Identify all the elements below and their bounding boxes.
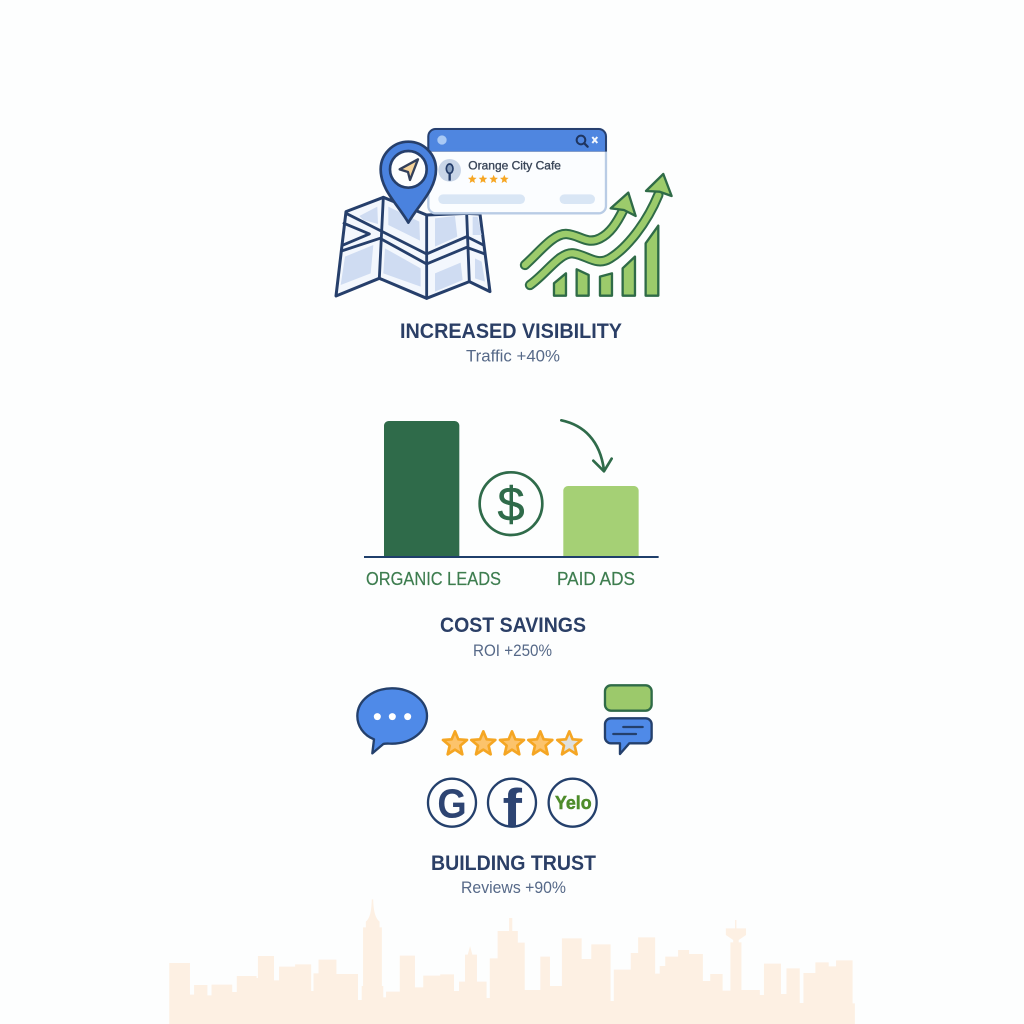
icon: location pin [381,142,436,223]
business listing window: Orange City Cafe [468,159,561,172]
bar chart: organic leads versus paid ads [350,420,670,565]
heading: cost savings: COST SAVINGS [440,614,586,637]
logo: facebook [488,779,536,838]
city skyline silhouette [169,899,855,1024]
icon: chat messages [605,685,652,754]
icon: speech bubble [357,688,427,753]
chart: growth arrows and bars [525,174,672,296]
rating stars [443,731,581,754]
label: organic leads: ORGANIC LEADS [366,568,501,589]
metric: reviews: Reviews +90% [461,879,566,897]
icon: folded map [336,197,490,298]
panel: building trust [357,685,652,897]
logo: yelo: Yelo [555,792,592,813]
panel: cost savings [350,420,670,660]
business listing window [428,129,606,213]
logo: yelo [549,779,597,827]
arrow: down to paid ads [561,420,612,471]
heading: increased visibility: INCREASED VISIBILITY [400,320,622,343]
logo: google: G [437,780,467,826]
metric: roi: ROI +250% [473,642,552,660]
label: paid ads: PAID ADS [557,568,635,589]
panel: increased visibility [336,129,672,366]
logo: facebook: f [503,779,522,838]
logo: google [428,779,476,827]
icon: dollar coin: $ [497,478,525,532]
heading: building trust: BUILDING TRUST [431,852,596,875]
metric: traffic: Traffic +40% [466,346,560,366]
icon: dollar coin [480,472,542,535]
